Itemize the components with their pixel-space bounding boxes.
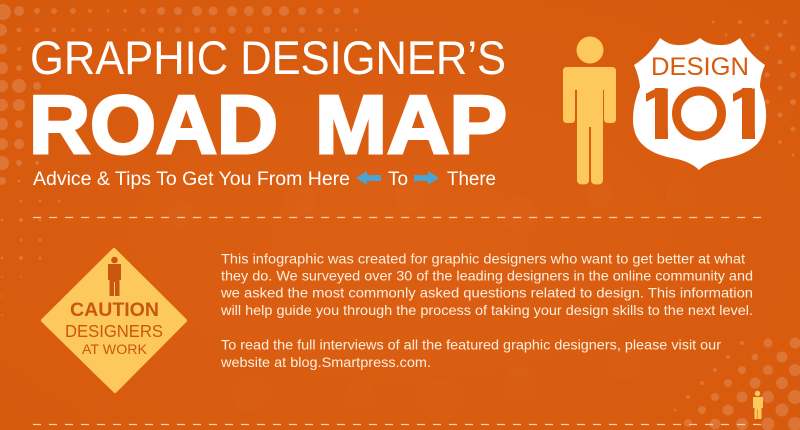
intro text block: This infographic was created for graphic designers who want to get better at what	[221, 250, 745, 266]
title: Graphic Designer's Road Map: ROAD	[29, 78, 278, 171]
subtitle with arrows: There	[447, 168, 496, 190]
shield text: Design: DESIGN	[651, 53, 749, 81]
icon: yellow person	[563, 36, 616, 184]
icon: small yellow person	[753, 391, 763, 419]
sign text: caution designers at work: DESIGNERS	[65, 321, 163, 341]
subtitle with arrows: To	[388, 168, 408, 190]
subtitle with arrows	[33, 168, 496, 190]
divider: top dashed line	[33, 216, 765, 218]
sign text: caution designers at work	[65, 300, 163, 357]
title: Graphic Designer's Road Map	[29, 31, 507, 171]
divider: bottom dashed line	[33, 424, 765, 426]
subtitle with arrows: Advice & Tips To Get You From Here	[33, 168, 350, 190]
intro text block	[220, 250, 753, 370]
intro text block: will help guide you through the process of taking your design skills to the next level.	[220, 302, 753, 318]
icon: right arrow	[414, 171, 439, 185]
icon: Design 101 route shield	[633, 38, 772, 170]
intro text block: To read the full interviews of all the featured graphic designers, please visit our	[221, 336, 721, 352]
shield number: 101: 101	[634, 73, 772, 155]
title: Graphic Designer's Road Map: GRAPHIC DESIGNER’S	[30, 31, 506, 84]
title: Graphic Designer's Road Map: MAP	[315, 78, 507, 171]
intro text block: they do. We surveyed over 30 of the leading designers in the online community and	[221, 268, 753, 284]
sign text: caution designers at work: CAUTION	[70, 300, 159, 321]
sign text: caution designers at work: AT WORK	[82, 341, 148, 357]
icon: person on sign	[108, 257, 121, 296]
caution sign	[43, 250, 185, 391]
intro text block: we asked the most commonly asked questions related to design. This information	[220, 284, 753, 300]
intro text block: website at blog.Smartpress.com.	[220, 354, 431, 370]
icon: left arrow	[356, 171, 381, 185]
